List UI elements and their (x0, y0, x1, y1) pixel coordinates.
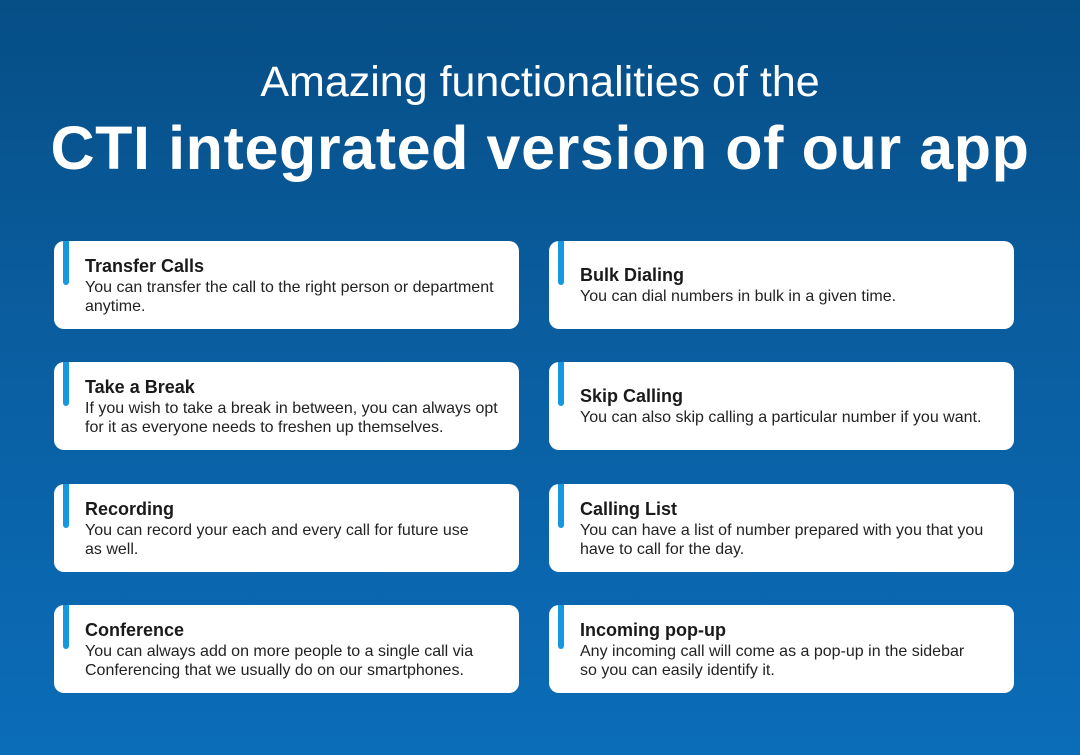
heading: CTI integrated version of our app (51, 114, 1029, 182)
card: bulk dialing: Bulk Dialing (580, 265, 684, 285)
card: take a break: If you wish to take a break in between, you can always opt (85, 400, 498, 416)
card: calling list: have to call for the day. (580, 540, 744, 558)
card: conference: Conferencing that we usually do on our smartphones. (85, 662, 464, 678)
card: take a break (54, 362, 519, 450)
card: calling list: You can have a list of number prepared with you that you (580, 522, 983, 538)
card: transfer calls: anytime. (85, 298, 145, 314)
card: recording: You can record your each and every call for future use (85, 522, 469, 538)
card: take a break: for it as everyone needs to freshen up themselves. (85, 418, 443, 436)
card: take a break: Take a Break (85, 376, 195, 396)
card: recording: Recording (85, 498, 174, 518)
card: recording (54, 484, 519, 572)
card: calling list: Calling List (580, 498, 677, 518)
card: skip calling: Skip Calling (580, 386, 683, 406)
card: transfer calls: You can transfer the call to the right person or department (85, 278, 494, 296)
card: conference: You can always add on more people to a single call via (85, 642, 473, 660)
card: transfer calls: Transfer Calls (85, 256, 204, 276)
card: incoming pop-up: Incoming pop-up (580, 620, 726, 640)
card: transfer calls (54, 241, 519, 329)
card: incoming pop-up: so you can easily identify it. (580, 662, 775, 678)
title: Amazing functionalities of the (260, 58, 820, 106)
card: recording: as well. (85, 540, 138, 558)
card: conference (54, 605, 519, 693)
card: incoming pop-up: Any incoming call will come as a pop-up in the sidebar (580, 642, 964, 660)
card: skip calling (549, 362, 1014, 450)
card: bulk dialing: You can dial numbers in bulk in a given time. (580, 288, 896, 305)
card: calling list (549, 484, 1014, 572)
card: skip calling: You can also skip calling a particular number if you want. (580, 409, 981, 426)
card: incoming pop-up (549, 605, 1014, 693)
card: bulk dialing (549, 241, 1014, 329)
card: conference: Conference (85, 620, 184, 640)
